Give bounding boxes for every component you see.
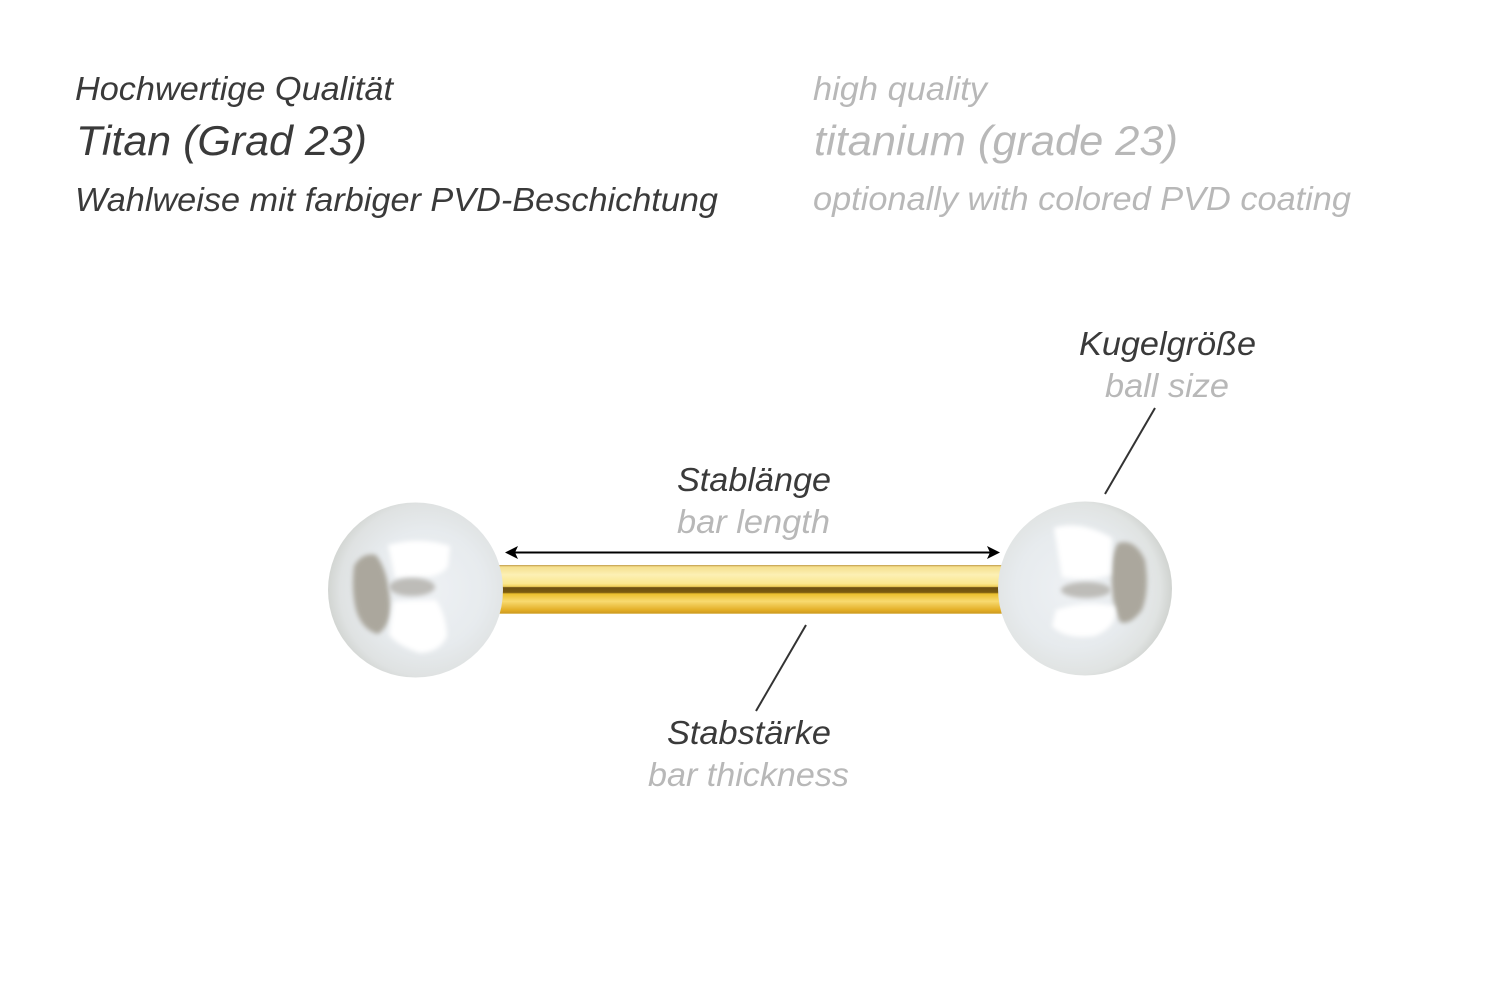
- heading: English product description: [813, 70, 1352, 217]
- text: material German: Titan (Grad 23): [76, 117, 367, 164]
- label: bar thickness: [648, 714, 849, 793]
- arrow: bar length dimension: [505, 546, 1000, 559]
- gold bar: [497, 565, 1003, 614]
- label: ball size: Kugelgröße: [1079, 325, 1256, 362]
- label: bar length: Stablänge: [677, 461, 831, 498]
- label: ball size: [1079, 325, 1256, 404]
- left pearl ball: [328, 502, 503, 678]
- barbell: gold bar with pearl balls: [328, 502, 1172, 678]
- text: material English: titanium (grade 23): [814, 117, 1178, 164]
- label: bar length: [677, 461, 831, 540]
- heading: German product description: [75, 70, 719, 218]
- text: coating note German: Wahlweise mit farbiger PVD-Beschichtung: [75, 181, 719, 218]
- text: high quality line German: Hochwertige Qualität: [75, 70, 395, 107]
- right pearl ball: [998, 502, 1172, 676]
- text: coating note English: optionally with colored PVD coating: [813, 180, 1352, 217]
- label: bar length: bar length: [677, 503, 830, 540]
- label: bar thickness: Stabstärke: [667, 714, 831, 751]
- text: high quality line English: high quality: [813, 70, 990, 107]
- pointer line: ball size: [1105, 408, 1155, 494]
- pointer line: bar thickness: [756, 625, 806, 711]
- label: bar thickness: bar thickness: [648, 756, 849, 793]
- label: ball size: ball size: [1105, 367, 1229, 404]
